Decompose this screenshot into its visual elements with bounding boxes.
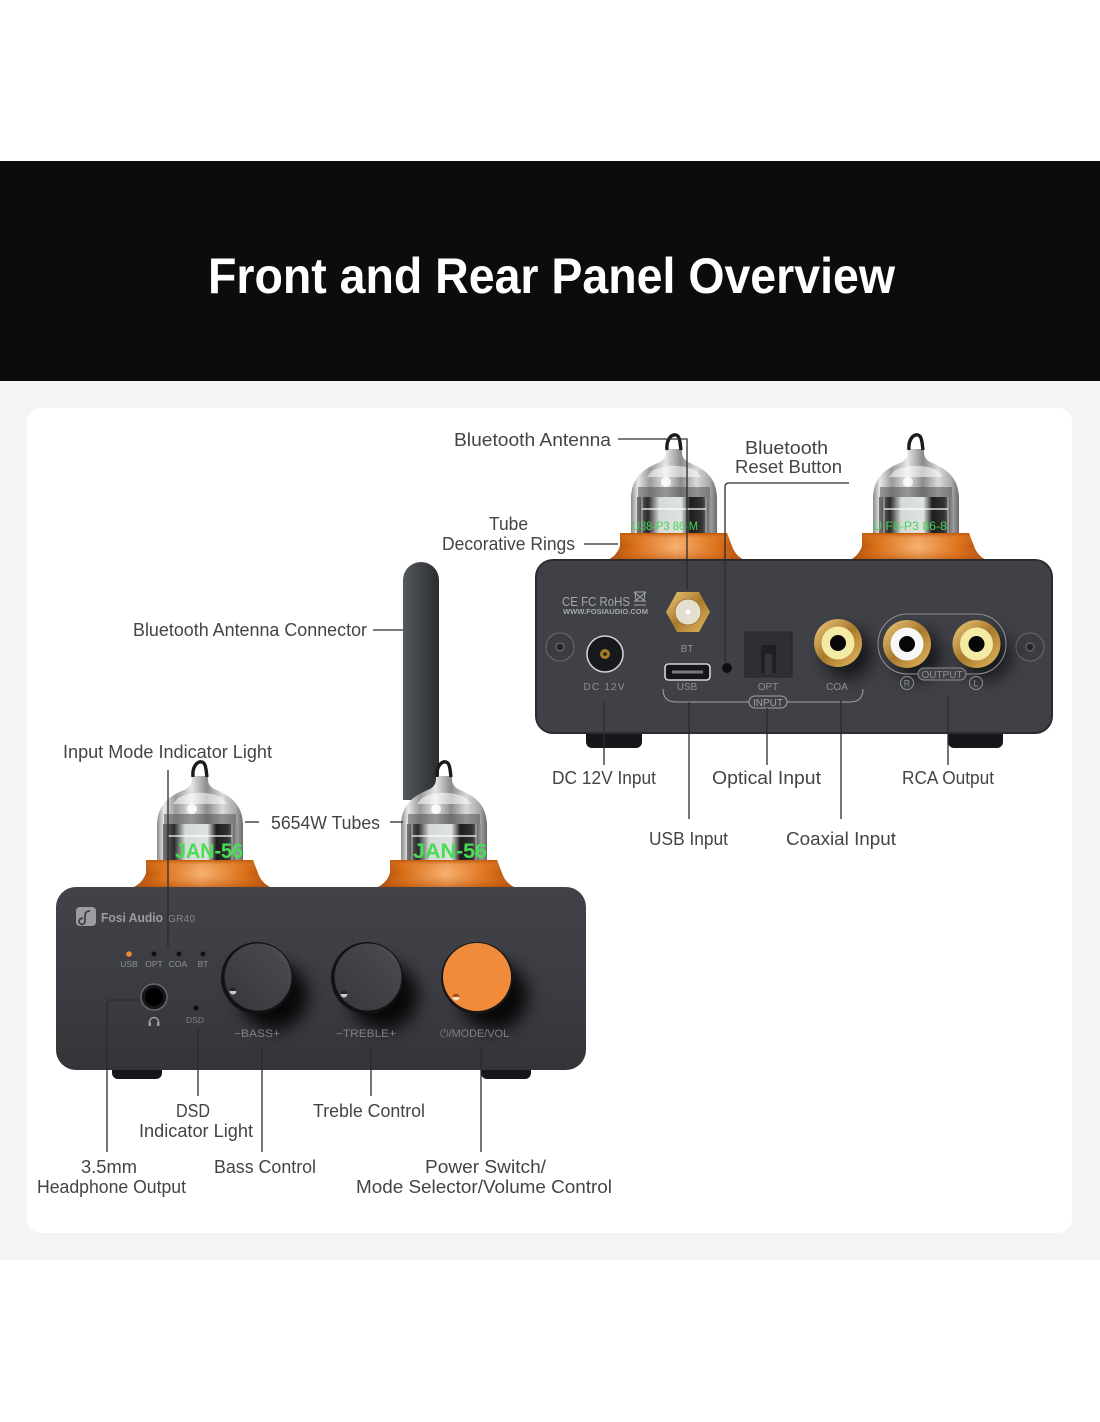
label: Coaxial Input: Coaxial Input [786,829,896,849]
label: Power Switch / Mode Selector / Volume Control: Power Switch/ [425,1157,546,1177]
rear amplifier unit [536,435,1052,748]
knob labels [234,1028,509,1040]
rear right tube: U F8-P3 86-8 [873,519,947,533]
front amplifier unit [56,762,586,1079]
certification marks [562,592,648,616]
label: 3.5mm Headphone Output: Headphone Output [37,1177,186,1197]
front feet [112,1060,531,1079]
Bluetooth antenna connector: BT [681,644,693,655]
label: Bluetooth Antenna Connector: Bluetooth Antenna Connector [133,620,367,640]
RCA output L socket [952,620,1000,668]
certification marks: WWW.FOSIAUDIO.COM [563,609,648,616]
label: Bluetooth Reset Button [735,438,842,477]
output bracket [878,614,1006,690]
title: Front and Rear Panel Overview [208,248,895,304]
input indicator lights: OPT [145,959,163,969]
label: RCA Output: RCA Output [902,768,994,788]
brand logo: Fosi Audio [101,911,163,925]
DSD light [186,1006,204,1025]
rear feet [586,728,1003,748]
USB-C port: USB [677,682,698,693]
output bracket: OUTPUT [921,670,963,681]
label: USB Input: USB Input [649,829,728,849]
label: Bluetooth Reset Button: Bluetooth [745,438,828,458]
DSD light: DSD [186,1015,204,1025]
optical port [745,632,792,693]
leader lines [107,439,948,1152]
optical port: OPT [758,682,778,693]
rear panel body [536,560,1052,733]
input indicator lights: USB [120,959,138,969]
Bluetooth antenna connector [666,592,710,655]
label: Bluetooth Reset Button: Reset Button [735,457,842,477]
input bracket [663,689,863,709]
label: Tube Decorative Rings: Decorative Rings [442,534,575,554]
headphone jack [141,984,167,1026]
coaxial socket: COA [826,682,848,693]
label: Tube Decorative Rings: Tube [489,514,528,534]
white content card [27,408,1072,1233]
DC 12V jack: DC 12V [584,682,625,693]
knob labels: −BASS+ [234,1028,280,1040]
brand logo [76,907,195,926]
volume knob [441,942,513,1014]
rear left tube: U38-P3 86-M [632,519,698,533]
label: Bass Control: Bass Control [214,1157,316,1177]
front left tube: JAN-56 [175,840,243,863]
antenna [403,562,439,800]
label: DSD Indicator Light [139,1101,253,1141]
RCA output R socket [883,620,931,668]
output bracket: L [973,678,979,688]
label: Input Mode Indicator Light: Input Mode Indicator Light [63,742,272,762]
DC 12V jack [584,636,625,693]
label: DSD Indicator Light: DSD [176,1101,210,1121]
label: 5654W Tubes: 5654W Tubes [271,813,380,833]
rear left tube [608,435,744,560]
input indicator lights: BT [198,959,208,969]
input indicator lights [120,951,208,969]
input bracket: INPUT [753,698,783,709]
knob labels: −TREBLE+ [336,1028,396,1040]
rear right tube [850,435,986,560]
label: 3.5mm Headphone Output [37,1157,186,1197]
label: Optical Input: Optical Input [712,768,821,788]
bass knob [221,942,293,1014]
label: DSD Indicator Light: Indicator Light [139,1121,253,1141]
rca shadows [823,629,1011,680]
label: Power Switch / Mode Selector / Volume Control [356,1157,612,1197]
output bracket: R [904,678,911,688]
label: Tube Decorative Rings [442,514,575,554]
treble knob [331,942,403,1014]
coaxial socket [814,619,862,693]
label: 3.5mm Headphone Output: 3.5mm [81,1157,137,1177]
title banner [0,161,1100,381]
certification marks: CE FC RoHS [562,595,630,609]
left screw [546,633,574,661]
front left tube [134,762,270,887]
input indicator lights: COA [169,959,188,969]
label: DC 12V Input: DC 12V Input [552,768,656,788]
front panel body [56,887,586,1070]
page background panel [0,381,1100,1260]
reset hole [722,663,732,673]
label: Bluetooth Antenna: Bluetooth Antenna [454,430,612,450]
knob shadows [240,962,528,1030]
label: Power Switch / Mode Selector / Volume Control: Mode Selector/Volume Control [356,1177,612,1197]
front right tube [378,762,514,887]
USB-C port [665,664,710,693]
knob labels: ⏻/MODE/VOL [440,1028,509,1040]
label: Treble Control: Treble Control [313,1101,425,1121]
front right tube: JAN-56 [413,840,487,863]
right screw [1016,633,1044,661]
brand logo: GR40 [168,914,195,925]
